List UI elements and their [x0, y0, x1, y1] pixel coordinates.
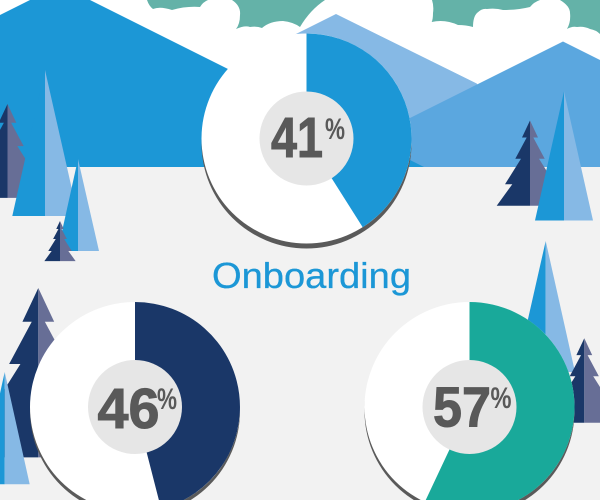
- tree: blue triangle lower left: [0, 372, 30, 484]
- donut chart: 57%: [364, 302, 575, 500]
- tree: blue triangle right: [535, 92, 593, 220]
- donut value slice: [425, 302, 575, 500]
- tree: blue triangle lower right: [516, 241, 575, 372]
- tree: dark pine right: [497, 120, 563, 206]
- tree: small blue triangle left: [58, 159, 99, 251]
- value label: 57: [433, 376, 491, 440]
- tree: dark pine lower right: [551, 338, 600, 423]
- tree: tall blue triangle left: [12, 70, 78, 216]
- value label: 46: [98, 377, 160, 441]
- donut value slice: [306, 34, 412, 227]
- donut shadow: [364, 306, 574, 500]
- donut shadow: [30, 306, 240, 500]
- percent sign: %: [490, 382, 512, 415]
- donut chart: 46%: [30, 302, 240, 500]
- donut value slice: [135, 302, 240, 500]
- mountain: bright blue left peak: [0, 0, 424, 167]
- donut base: [202, 34, 412, 244]
- donut centre disc: [88, 360, 182, 454]
- value label: 41: [271, 106, 323, 170]
- percent sign: %: [325, 113, 345, 146]
- mountain: light blue back peak: [295, 14, 490, 167]
- donut shadow: [202, 38, 412, 248]
- donut chart: 41%: [202, 34, 412, 248]
- donut centre disc: [422, 360, 516, 454]
- white clouds: [0, 0, 600, 167]
- tree: dark pine far left: [0, 104, 44, 198]
- donut base: [30, 302, 240, 500]
- mountain: mid blue right peak: [312, 42, 600, 167]
- tree: large dark pine lower left: [0, 288, 104, 457]
- tree: small dark pine: [44, 221, 76, 261]
- donut base: [364, 302, 574, 500]
- teal sky: [0, 0, 600, 60]
- heading: Onboarding: [212, 255, 411, 296]
- donut centre disc: [260, 92, 354, 186]
- percent sign: %: [157, 383, 177, 416]
